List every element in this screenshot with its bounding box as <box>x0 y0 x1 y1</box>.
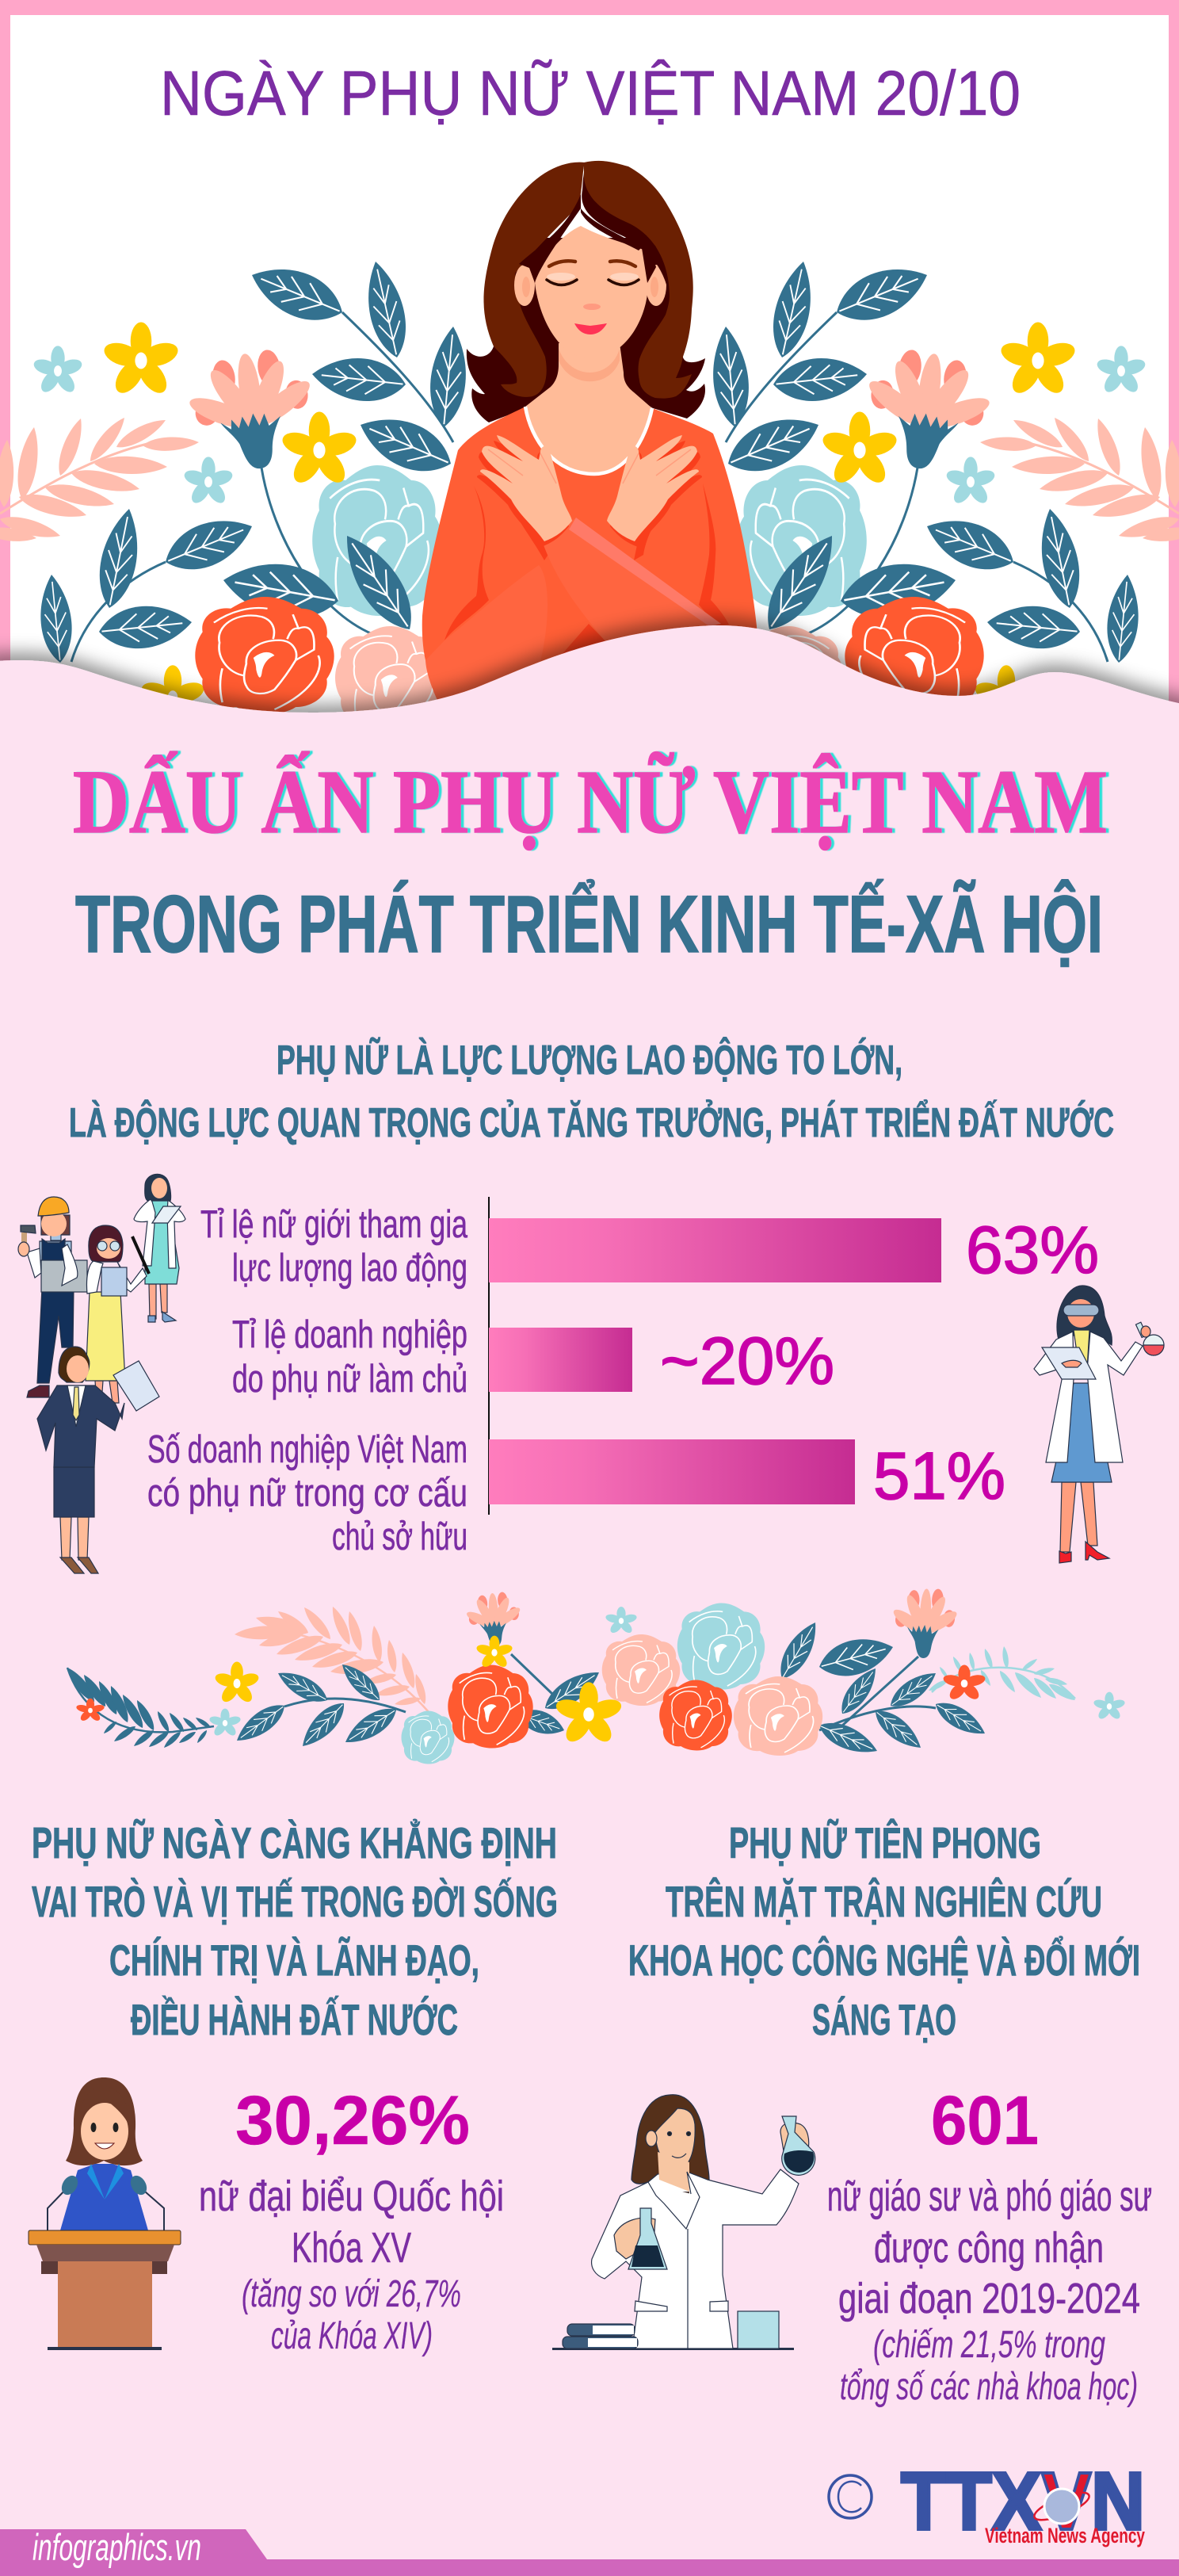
section heading: research <box>628 1818 1140 2044</box>
bar label 3: có phụ nữ trong cơ cấu <box>147 1472 467 1515</box>
small blue flowers <box>32 346 235 506</box>
bar: ~20% <box>489 1324 834 1398</box>
roses <box>401 1603 822 1764</box>
bar label 2: Tỉ lệ doanh nghiệp <box>232 1313 467 1356</box>
necklace <box>525 407 652 474</box>
footer band <box>0 2529 1179 2576</box>
woman with crossed hands <box>422 161 761 713</box>
icon: worker woman with hard hat <box>18 1197 87 1397</box>
title: NGÀY PHỤ NỮ VIỆT NAM 20/10 <box>160 58 1021 128</box>
left hand <box>477 435 572 547</box>
stat description: professors <box>827 2173 1152 2408</box>
footer source: infographics.vn <box>32 2526 201 2568</box>
icon: teacher woman in yellow skirt <box>86 1225 149 1403</box>
section heading: politics: PHỤ NỮ NGÀY CÀNG KHẲNG ĐỊNH <box>32 1818 557 1867</box>
stat description: parliament: của Khóa XIV) <box>271 2315 433 2357</box>
stems <box>284 1654 936 1730</box>
section heading: labour force: PHỤ NỮ LÀ LỰC LƯỢNG LAO ĐỘNG TO LỚN, <box>277 1037 902 1084</box>
value: 51% <box>873 1439 1005 1513</box>
floral garland <box>63 1587 1126 1764</box>
crossing sleeves <box>425 565 548 713</box>
hair parting and locks <box>519 165 670 297</box>
section heading: politics: CHÍNH TRỊ VÀ LÃNH ĐẠO, <box>109 1936 479 1985</box>
floral illustration: left half <box>0 254 471 729</box>
blue fern <box>927 1646 1077 1703</box>
bar label 3: Số doanh nghiệp Việt Nam <box>147 1428 467 1471</box>
eyes and brows <box>547 261 639 285</box>
neck and chest <box>525 343 652 474</box>
sleeve shading <box>445 483 729 656</box>
blue leaves <box>231 1617 990 1761</box>
chart axis <box>488 1197 490 1515</box>
bar label 1 <box>200 1203 468 1290</box>
pink fern <box>0 414 199 545</box>
dark fern <box>63 1664 214 1750</box>
nose <box>583 304 601 310</box>
bar label 1: lực lượng lao động <box>232 1247 467 1290</box>
tulip <box>179 344 325 478</box>
icon: woman at podium <box>29 2077 181 2350</box>
bar label 2 <box>232 1313 467 1401</box>
dress <box>422 407 761 713</box>
icon: business woman with papers <box>37 1347 159 1573</box>
icon: scientist with flasks <box>552 2095 815 2350</box>
hair right <box>584 161 693 399</box>
stems <box>71 312 453 662</box>
logo: TTXVN: TTXVN <box>901 2456 1145 2547</box>
section heading: politics: ĐIỀU HÀNH ĐẤT NƯỚC <box>131 1995 458 2044</box>
stat: 601: 601 <box>931 2082 1039 2159</box>
value: ~20% <box>660 1324 834 1398</box>
pink rose <box>335 626 445 729</box>
section heading: politics: VAI TRÒ VÀ VỊ THẾ TRONG ĐỜI SỐNG <box>32 1877 558 1926</box>
bar label 1: Tỉ lệ nữ giới tham gia <box>200 1203 468 1246</box>
value: 63% <box>966 1213 1099 1287</box>
stat description: parliament: nữ đại biểu Quốc hội <box>199 2173 504 2220</box>
blue leaves <box>36 254 471 664</box>
top and side pink border <box>0 0 1179 713</box>
section heading: research: PHỤ NỮ TIÊN PHONG <box>729 1818 1041 1867</box>
tulips <box>464 1587 960 1660</box>
lower background <box>0 753 1179 2576</box>
wave divider <box>0 625 1179 793</box>
pink fern <box>235 1604 429 1712</box>
mouth <box>574 323 607 334</box>
small flowers <box>75 1607 1126 1746</box>
ears <box>514 265 666 306</box>
bar label 2: do phụ nữ làm chủ <box>232 1358 467 1401</box>
blue rose <box>312 465 442 616</box>
copyright symbol <box>829 2475 872 2518</box>
yellow flowers <box>101 323 359 729</box>
bar label 3: chủ sở hữu <box>332 1515 467 1558</box>
bar label 3 <box>147 1428 467 1558</box>
bar: 63% <box>489 1213 1099 1287</box>
stat description: parliament: (tăng so với 26,7% <box>242 2273 461 2315</box>
hair shadow layer <box>467 238 705 422</box>
section heading: politics <box>32 1818 558 2044</box>
icon: scientist woman with teal dress <box>134 1174 185 1322</box>
hair left <box>483 162 585 397</box>
stat description: parliament: Khóa XV <box>292 2224 411 2272</box>
stat description: professors: được công nhận <box>874 2224 1104 2272</box>
bar: 51% <box>489 1439 1005 1513</box>
orange rose <box>195 597 334 714</box>
icon: scientist woman with goggles <box>1034 1286 1164 1563</box>
stat: 30,26%: 30,26% <box>235 2082 470 2159</box>
floral illustration: right half <box>708 254 1179 729</box>
right hand <box>607 435 702 547</box>
face <box>535 226 649 358</box>
stat description: parliament <box>199 2173 504 2357</box>
section heading: research: SÁNG TẠO <box>812 1995 956 2044</box>
section heading: labour force <box>69 1037 1114 1146</box>
